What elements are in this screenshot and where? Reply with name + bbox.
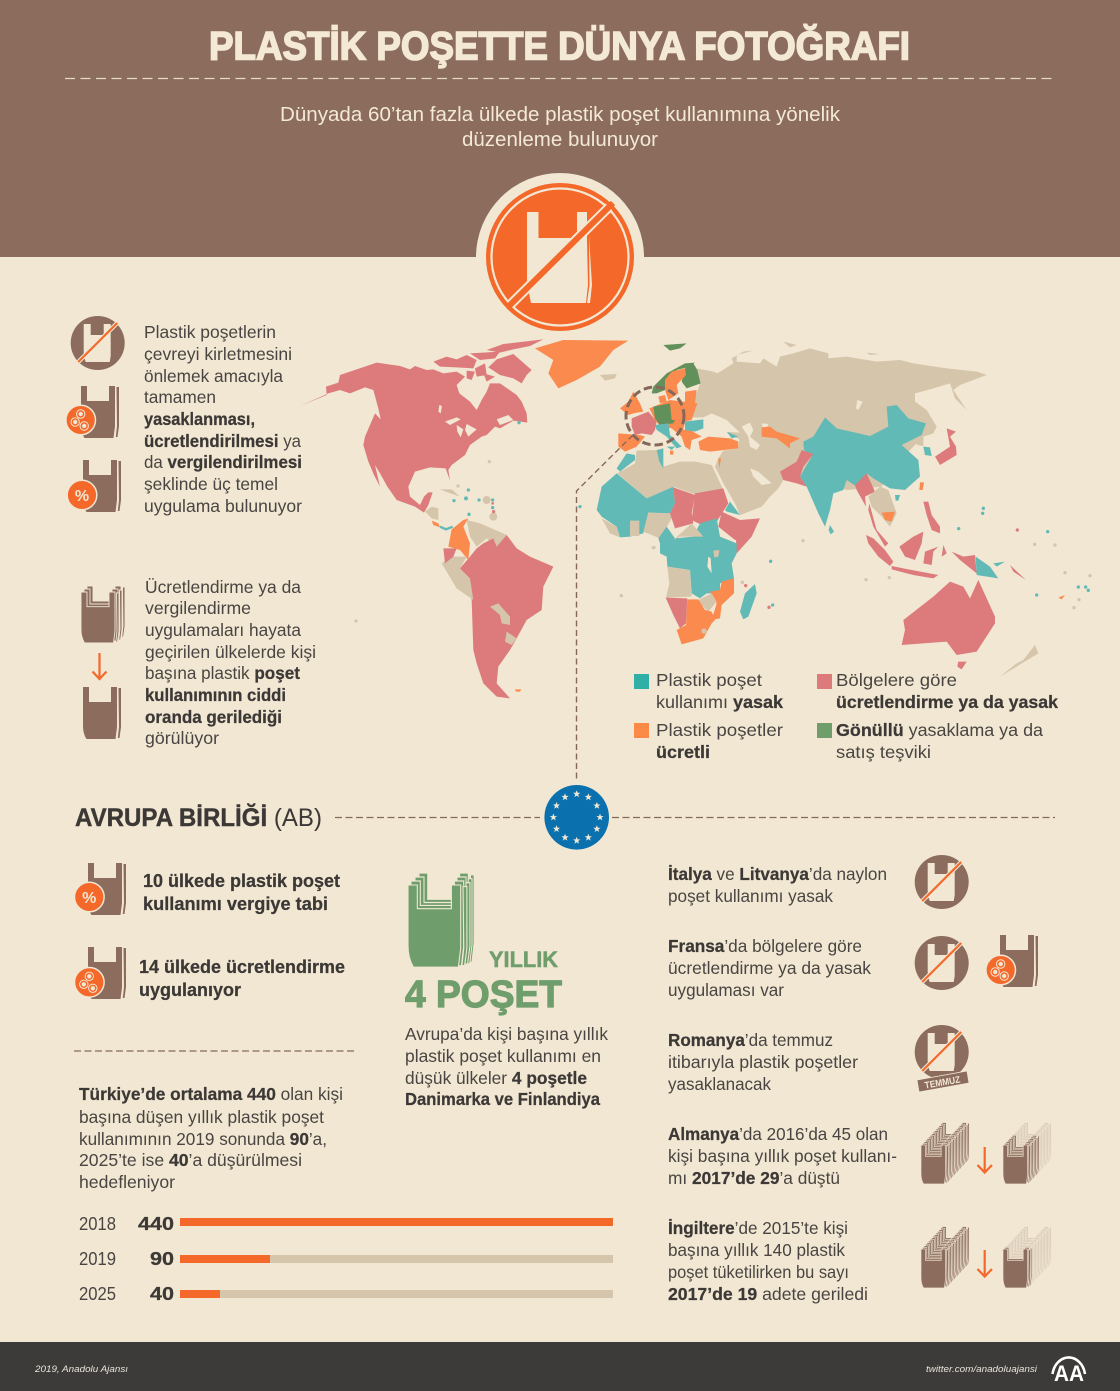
bar: 2019: 90: [150, 1249, 174, 1269]
text block: Romania: [668, 1030, 858, 1094]
icon: large banned plastic bag: [476, 173, 644, 341]
text block: three policy types: uygulama bulunuyor: [144, 496, 302, 516]
text block: UK: [668, 1218, 868, 1304]
legend item: banned: [634, 670, 783, 712]
text block: usage falls: [145, 577, 316, 748]
icon: ban France: [915, 936, 969, 990]
legend item: banned: Plastik poşet: [656, 670, 762, 690]
text block: Denmark and Finland: plastik poşet kullanımı en: [405, 1046, 601, 1066]
text block: France: uygulaması var: [668, 980, 784, 1000]
text block: Denmark and Finland: düşük ülkeler 4 poşetle: [405, 1068, 587, 1088]
stat: 10 countries: kullanımı vergiye tabi: [143, 894, 328, 914]
logo: AA: AA: [1054, 1361, 1084, 1386]
map: europe, africa, asia and oceania: [597, 342, 1092, 677]
bar: 2025: 40: [150, 1284, 174, 1304]
stat: 14 countries: [139, 957, 345, 1000]
header band: [0, 0, 1120, 257]
icon: Germany full stack: [921, 1123, 969, 1184]
icon: bag with coins: [66, 386, 119, 438]
text block: UK: başına yıllık 140 plastik: [668, 1240, 845, 1260]
text block: UK: İngiltere’de 2015’te kişi: [668, 1218, 848, 1238]
stat: yearly 4 bags: [405, 947, 562, 1016]
icon: charged bag France: [986, 935, 1038, 987]
text block: three policy types: Plastik poşetlerin: [144, 322, 276, 342]
text block: usage falls: kullanımının ciddi: [145, 685, 286, 705]
text block: Italy and Lithuania: [668, 864, 887, 906]
text block: usage falls: Ücretlendirme ya da: [145, 577, 301, 597]
text block: usage falls: oranda gerilediği: [145, 707, 282, 727]
text block: Türkiye target: Türkiye’de ortalama 440 olan kişi: [79, 1084, 343, 1104]
text block: Romania: yasaklanacak: [668, 1074, 771, 1094]
text block: Denmark and Finland: Danimarka ve Finlandiya: [405, 1089, 600, 1109]
arrow: UK: [978, 1250, 992, 1276]
icon: bag with percent: %: [75, 488, 89, 505]
text block: usage falls: uygulamaları hayata: [145, 620, 301, 640]
text block: UK: 2017’de 19 adete geriledi: [668, 1284, 868, 1304]
icon: ban Romania with July tag: [915, 1025, 969, 1092]
stat: yearly 4 bags: 4 POŞET: [405, 974, 562, 1016]
map: americas: [300, 339, 655, 698]
text block: Italy and Lithuania: poşet kullanımı yasak: [668, 886, 833, 906]
text block: Romania: itibarıyla plastik poşetler: [668, 1052, 858, 1072]
text block: Türkiye target: hedefleniyor: [79, 1172, 175, 1192]
text block: three policy types: şeklinde üç temel: [144, 474, 278, 494]
text block: three policy types: ücretlendirilmesi ya: [144, 431, 301, 451]
world map: [300, 339, 1092, 698]
text block: three policy types: tamamen: [144, 387, 216, 407]
legend item: charged: Plastik poşetler: [656, 720, 783, 740]
icon: green stack of bags: [408, 873, 474, 967]
subtitle: düzenleme bulunuyor: [462, 129, 658, 151]
bar: 2018: 2018: [79, 1214, 116, 1234]
text block: Germany: mı 2017’de 29’a düştü: [668, 1168, 840, 1188]
stat: 14 countries: 14 ülkede ücretlendirme: [139, 957, 345, 977]
text block: France: ücretlendirme ya da yasak: [668, 958, 871, 978]
arrow: down: [92, 653, 106, 679]
text block: three policy types: önlemek amacıyla: [144, 366, 283, 386]
text block: Germany: Almanya’da 2016’da 45 olan: [668, 1124, 888, 1144]
text block: Türkiye target: kullanımının 2019 sonunda 90’a,: [79, 1129, 327, 1149]
icon: stack of bags: [81, 586, 125, 643]
icon: Germany reduced stack: [1003, 1123, 1051, 1184]
bar: 2019: [79, 1249, 613, 1269]
text block: Germany: kişi başına yıllık poşet kullanı-: [668, 1146, 897, 1166]
legend item: voluntary: satış teşviki: [836, 742, 931, 762]
text block: three policy types: yasaklanması,: [144, 409, 255, 429]
legend item: regional: Bölgelere göre: [836, 670, 957, 690]
text block: France: Fransa’da bölgelere göre: [668, 936, 862, 956]
icon: EU flag: [544, 785, 609, 850]
text block: Denmark and Finland: Avrupa’da kişi başına yıllık: [405, 1024, 608, 1044]
callout: dashed circle and leader to EU: [576, 387, 684, 782]
text block: UK: poşet tüketilirken bu sayı: [668, 1262, 849, 1282]
bar chart: Türkiye per capita use: [79, 1214, 613, 1304]
text block: Denmark and Finland: [405, 1024, 608, 1109]
icon: taxed bag: %: [82, 890, 96, 907]
legend item: charged: ücretli: [656, 742, 710, 762]
text block: usage falls: geçirilen ülkelerde kişi: [145, 642, 316, 662]
stat: 14 countries: uygulanıyor: [139, 980, 241, 1000]
text block: Romania: Romanya’da temmuz: [668, 1030, 833, 1050]
footer social handle: twitter.com/anadoluajansi: [926, 1364, 1038, 1375]
icon: taxed bag: [74, 863, 126, 915]
text block: usage falls: vergilendirme: [145, 598, 251, 618]
icon: UK reduced stack: [1003, 1227, 1051, 1288]
bar: 2025: [79, 1284, 613, 1304]
subtitle: Dünyada 60’tan fazla ülkede plastik poşet kullanımına yönelik: [280, 104, 841, 126]
title: PLASTİK POŞETTE DÜNYA FOTOĞRAFI: [209, 22, 910, 68]
text block: usage falls: görülüyor: [145, 728, 219, 748]
text block: Italy and Lithuania: İtalya ve Litvanya’da naylon: [668, 864, 887, 884]
icon: single bag: [83, 687, 121, 739]
text block: France: [668, 936, 871, 1000]
footer: [0, 1342, 1120, 1391]
legend: [634, 670, 1058, 762]
heading: European Union: AVRUPA BİRLİĞİ (AB): [75, 803, 322, 832]
text block: three policy types: [144, 322, 302, 516]
icon: bag with percent: [67, 460, 121, 512]
text block: three policy types: çevreyi kirletmesini: [144, 344, 292, 364]
arrow: Germany: [978, 1147, 992, 1172]
text block: usage falls: başına plastik poşet: [145, 663, 300, 683]
icon: ban Romania with July tag: TEMMUZ: [924, 1074, 961, 1092]
text block: Türkiye target: başına düşen yıllık plastik poşet: [79, 1107, 324, 1127]
icon: ban: [71, 316, 125, 370]
bar: 2025: 2025: [79, 1284, 116, 1304]
icon: UK full stack: [921, 1227, 969, 1288]
text block: three policy types: da vergilendirilmesi: [144, 452, 302, 472]
bar: 2019: 2019: [79, 1249, 116, 1269]
map: europe detail: [617, 363, 738, 472]
icon: ban Italy: [915, 855, 969, 909]
legend item: banned: kullanımı yasak: [656, 692, 783, 712]
subtitle: [280, 104, 841, 151]
icon: charged bag: [74, 947, 126, 999]
footer credit: 2019, Anadolu Ajansı: [34, 1364, 128, 1375]
legend item: voluntary: Gönüllü yasaklama ya da: [836, 720, 1043, 740]
stat: 10 countries: 10 ülkede plastik poşet: [143, 871, 340, 891]
bar: 2018: [79, 1214, 613, 1234]
stat: 10 countries: [143, 871, 340, 914]
legend item: voluntary: [817, 720, 1043, 762]
legend item: regional: [817, 670, 1058, 712]
text block: Germany: [668, 1124, 897, 1188]
bar: 2018: 440: [138, 1214, 174, 1234]
text block: Türkiye target: [79, 1084, 343, 1192]
text block: Türkiye target: 2025’te ise 40’a düşürülmesi: [79, 1150, 302, 1170]
stat: yearly 4 bags: YILLIK: [489, 947, 558, 972]
legend item: regional: ücretlendirme ya da yasak: [836, 692, 1058, 712]
legend item: charged: [634, 720, 783, 762]
